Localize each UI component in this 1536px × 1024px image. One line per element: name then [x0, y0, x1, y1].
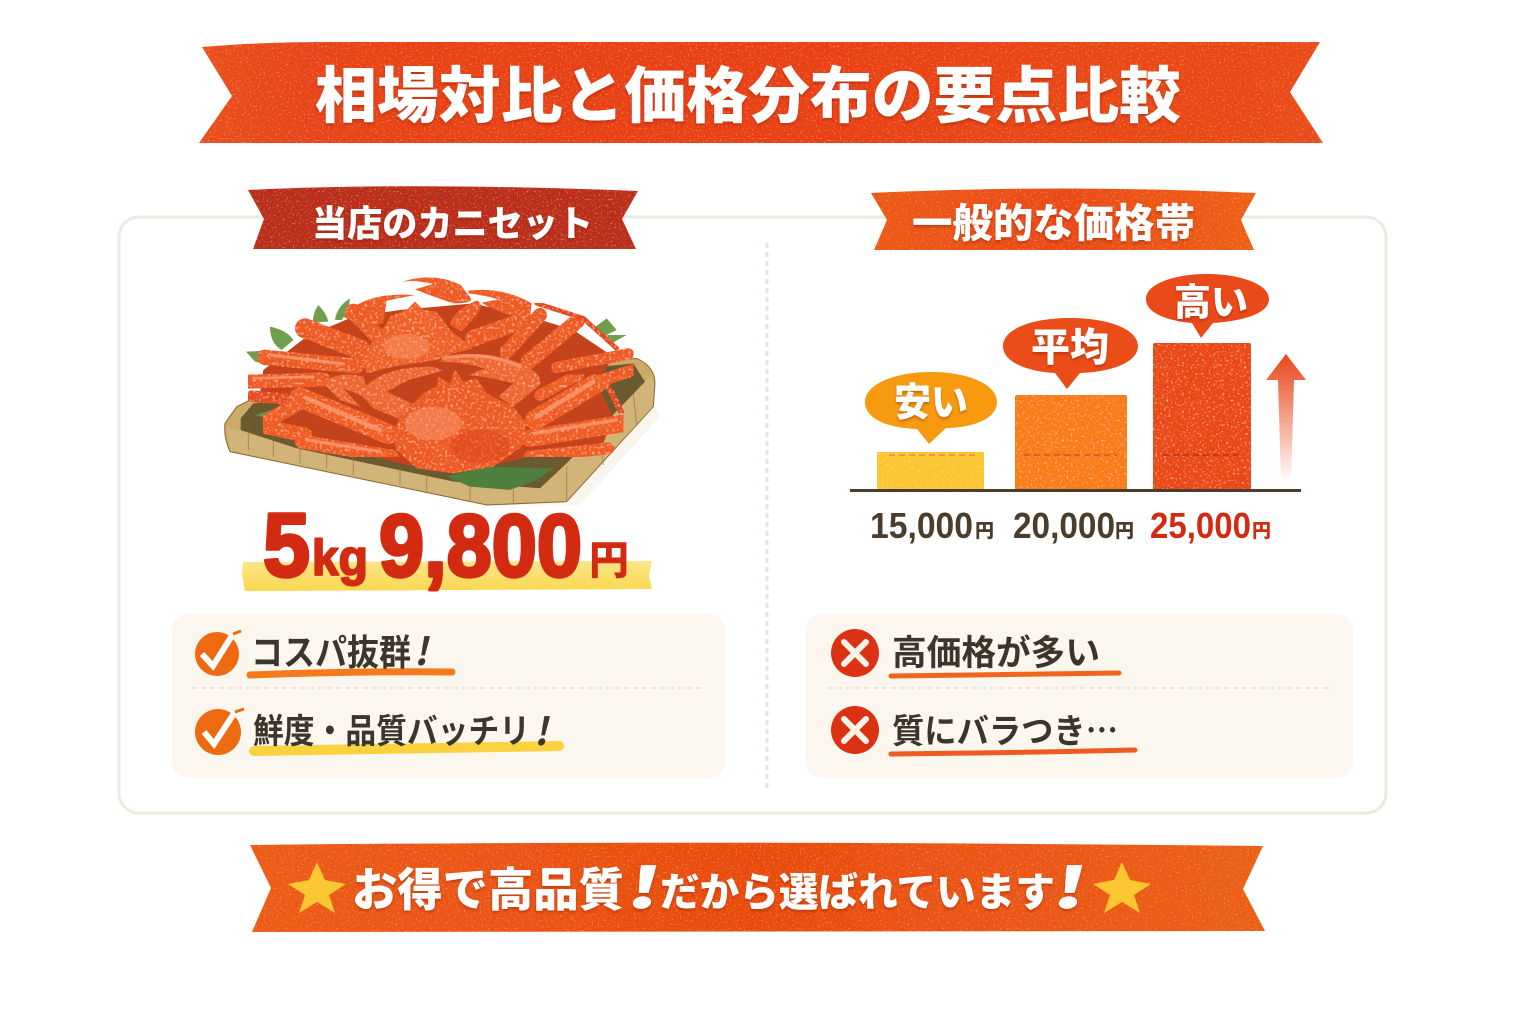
- price labels: 15,000: [870, 505, 973, 546]
- icon: cross 1: [831, 629, 879, 677]
- main comparison panel: [119, 217, 1386, 813]
- drawback 1 text: 高価格が多い: [892, 625, 1100, 676]
- bubble: low: 安い: [894, 372, 968, 428]
- panel: merits: [172, 614, 725, 778]
- center divider: [766, 243, 768, 792]
- bar: low price: [877, 452, 984, 490]
- price labels: 円: [1252, 516, 1271, 543]
- merit 1 text: コスパ抜群: [251, 624, 411, 676]
- tray shadow: [487, 407, 660, 505]
- price: 円: [589, 528, 629, 586]
- star right: [1093, 862, 1151, 913]
- highlights on legs: [253, 355, 617, 452]
- price highlight band: [242, 561, 652, 591]
- bar: high price: [1153, 343, 1251, 490]
- top claws: [343, 277, 532, 332]
- axis line: [850, 489, 1301, 492]
- drawback 2 text: 質にバラつき…: [892, 704, 1118, 753]
- merit 2 text: 鮮度・品質バッチリ: [253, 704, 530, 753]
- bottom text: !: [1047, 844, 1095, 925]
- star left: [288, 862, 346, 913]
- right heading text: 一般的な価格帯: [912, 191, 1195, 249]
- bottom text: だから選ばれています: [660, 860, 1055, 918]
- shadow mass under crabs: [260, 303, 613, 467]
- underline 1: [891, 673, 1119, 676]
- bubble: low: [865, 372, 997, 444]
- icon: cross 2: [831, 706, 879, 754]
- bubble: high: 高い: [1174, 272, 1248, 326]
- price: [263, 496, 629, 596]
- bottom text: !: [621, 844, 669, 925]
- title text: 相場対比と価格分布の要点比較: [315, 46, 1181, 135]
- price: kg: [312, 530, 368, 586]
- bubble: average: 平均: [1031, 317, 1109, 373]
- left heading text: 当店のカニセット: [312, 195, 593, 247]
- rising arrow: [1266, 354, 1306, 482]
- price labels: 円: [1115, 516, 1134, 543]
- left heading ribbon: [248, 186, 638, 249]
- price: 9,800: [379, 496, 582, 595]
- price labels: 20,000: [1013, 505, 1115, 546]
- bottom banner: [250, 843, 1265, 932]
- panel: drawbacks: [806, 614, 1353, 778]
- wooden tray: [225, 358, 655, 505]
- bar chart: general price range: [850, 272, 1306, 546]
- front legs: [263, 375, 623, 457]
- illustration: crab set on wooden tray: [225, 277, 660, 505]
- bubble: average: [1003, 317, 1138, 389]
- icon: check 2: [195, 709, 244, 755]
- bubble: high: [1146, 272, 1269, 338]
- panel: merits: !: [411, 621, 437, 677]
- price labels: 円: [975, 516, 994, 543]
- bar: average price: [1015, 395, 1127, 490]
- panel: merits: !: [531, 701, 557, 757]
- title banner: [199, 42, 1323, 143]
- bottom text: お得で高品質: [352, 854, 624, 920]
- underline: orange: [250, 672, 452, 675]
- green leaves: [246, 298, 627, 365]
- underline: yellow: [254, 746, 559, 751]
- front carapace: [392, 370, 527, 473]
- tray rim planks: [226, 377, 654, 504]
- icon: check 1: [195, 631, 241, 676]
- front claws: [323, 355, 540, 420]
- rear carapace: [362, 302, 473, 373]
- green garnish: [447, 467, 553, 490]
- price labels: 25,000: [1150, 505, 1251, 546]
- bottom text: [352, 844, 1095, 925]
- back legs: [248, 303, 633, 413]
- price: 5: [263, 496, 310, 596]
- underline 2: [891, 750, 1135, 754]
- price labels: [870, 505, 1271, 546]
- right heading ribbon: [871, 188, 1256, 250]
